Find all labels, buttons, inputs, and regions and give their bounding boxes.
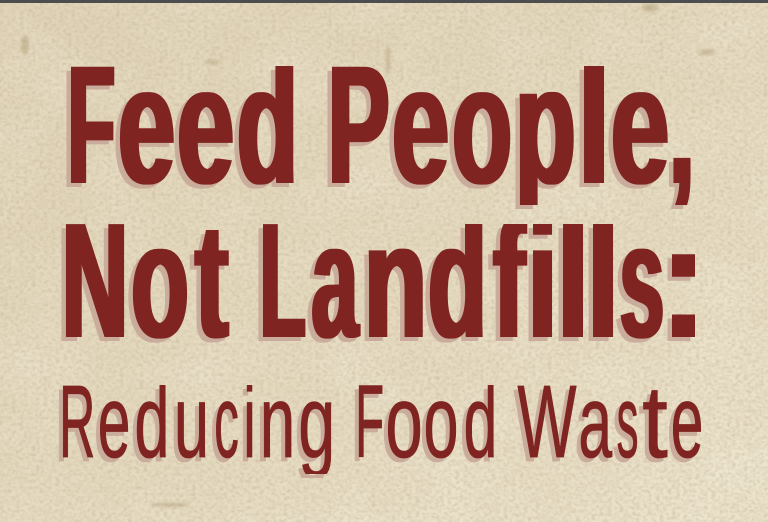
title line 2: Not Landfills:: s <box>620 189 664 372</box>
title line 1: Feed People,: F <box>68 30 115 219</box>
subtitle: Reducing Food Waste: s <box>616 364 639 479</box>
title line 1: Feed People,: o <box>452 30 512 219</box>
title line 2: Not Landfills:: L <box>260 189 306 372</box>
title line 2: Not Landfills:: : <box>661 189 706 372</box>
subtitle: Reducing Food Waste: o <box>424 364 458 479</box>
subtitle: Reducing Food Waste: F <box>355 364 384 479</box>
top edge bar <box>0 0 768 3</box>
title line 1: Feed People,: P <box>328 30 390 219</box>
subtitle: Reducing Food Waste: d <box>134 364 170 479</box>
title line 1: Feed People,: e <box>177 30 234 219</box>
title line 2: Not Landfills:: f <box>493 189 525 372</box>
subtitle: Reducing Food Waste: u <box>174 364 209 479</box>
title line 2: Not Landfills:: l <box>557 189 589 372</box>
subtitle: Reducing Food Waste: d <box>464 364 498 479</box>
title line 2: Not Landfills:: d <box>428 189 487 372</box>
title line 1: Feed People,: e <box>392 30 449 219</box>
subtitle: Reducing Food Waste: t <box>642 364 668 479</box>
subtitle: Reducing Food Waste: e <box>98 364 130 479</box>
title line 2: Not Landfills:: N <box>62 189 128 372</box>
title line 1: Feed People,: , <box>669 30 695 219</box>
title line 2: Not Landfills: <box>62 224 695 343</box>
subtitle: Reducing Food Waste: i <box>243 364 256 479</box>
title line 2: Not Landfills:: l <box>587 189 619 372</box>
subtitle: Reducing Food Waste <box>59 385 702 478</box>
subtitle: Reducing Food Waste: c <box>214 364 239 479</box>
title line 2: Not Landfills:: n <box>364 189 427 372</box>
title line 1: Feed People,: e <box>118 30 175 219</box>
title line 1: Feed People, <box>66 66 690 209</box>
title line 1: Feed People,: l <box>578 30 610 219</box>
subtitle: Reducing Food Waste: R <box>59 364 95 479</box>
subtitle: Reducing Food Waste: n <box>260 364 295 479</box>
title line 2: Not Landfills:: t <box>195 189 229 372</box>
subtitle: Reducing Food Waste: a <box>578 364 613 479</box>
subtitle: Reducing Food Waste: e <box>671 364 703 479</box>
subtitle: Reducing Food Waste: o <box>385 364 423 479</box>
title line 2: Not Landfills:: o <box>131 189 189 372</box>
title line 1: Feed People,: d <box>237 30 298 219</box>
subtitle: Reducing Food Waste: W <box>517 364 577 479</box>
title line 1: Feed People,: e <box>611 30 669 219</box>
subtitle: Reducing Food Waste: g <box>298 364 335 479</box>
title line 1: Feed People,: p <box>515 30 576 219</box>
title line 2: Not Landfills:: i <box>527 189 558 372</box>
title line 2: Not Landfills:: a <box>312 189 359 372</box>
